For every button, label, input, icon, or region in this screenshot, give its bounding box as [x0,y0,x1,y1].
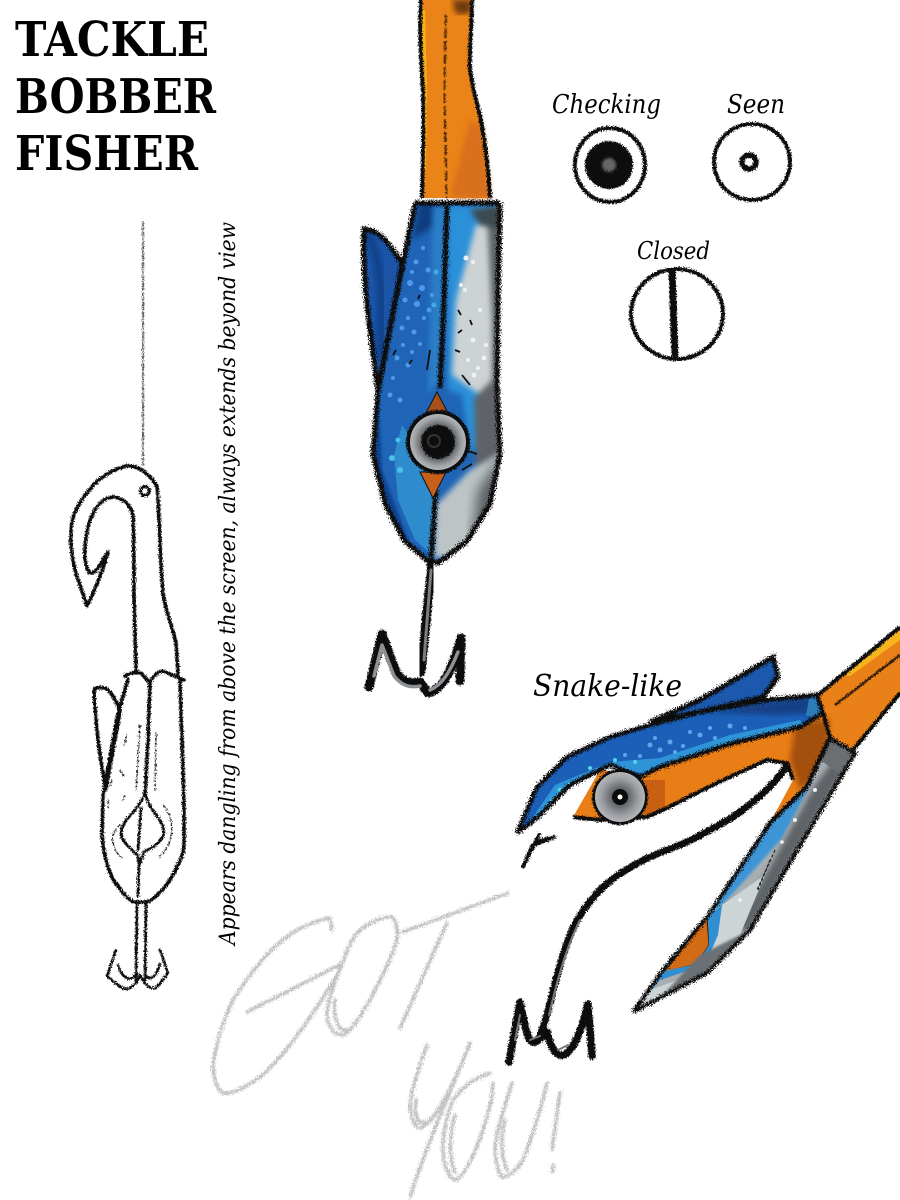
fin [364,229,402,391]
lower throat: orange [573,713,830,823]
sketch: dangling line [142,222,144,465]
lure line and hook [509,766,787,1062]
body: orange diamonds above and below eye [420,392,449,498]
label: snake-like: Snake-like [533,669,682,704]
body: speckles [388,246,488,473]
long neck: orange [818,627,900,750]
title: FISHER [15,126,199,182]
caption: dangling behaviour: Appears dangling from above the screen, always extends beyond view [216,222,241,947]
exclamation mark [552,1093,560,1172]
sketch: closed face eye [121,793,164,896]
letter Y [410,1043,470,1197]
eye state: checking: Checking [552,90,661,120]
upper head: blue with speckles [510,690,830,840]
neck: orange [420,0,490,198]
letter T [400,893,508,1028]
letter G [213,918,343,1093]
title: TACKLE [15,12,209,68]
eye state: seen [714,90,790,200]
eye state: seen: Seen [727,90,785,120]
lower jaw: blue and grey [620,730,860,1020]
title [15,12,217,182]
main hook [369,562,461,693]
handwritten note: GOT YOU! [213,893,560,1197]
sketch: hook [136,902,146,980]
upper fin [650,657,778,722]
title: BOBBER [15,69,217,125]
line sketch: front view of creature [71,222,184,989]
side eye [592,769,648,825]
sketch: neck eye [140,486,150,496]
snake-like creature: open jaw view [509,627,900,1062]
main creature: hanging front view [364,0,505,693]
body: black flecks [393,240,477,470]
letter U [495,1083,547,1177]
eye state: checking [552,90,661,202]
tip hook at mouth [523,833,555,867]
body: blue and grey colour blocks [370,200,505,570]
letter O [327,917,397,1035]
eye state: closed: Closed [637,237,710,265]
body: ink outline and seams [373,203,500,563]
sketch: hooked neck [71,466,178,675]
main eye [406,410,470,474]
sketch: body [94,671,184,902]
letter O second [443,1073,493,1180]
eye state: closed [631,237,723,359]
